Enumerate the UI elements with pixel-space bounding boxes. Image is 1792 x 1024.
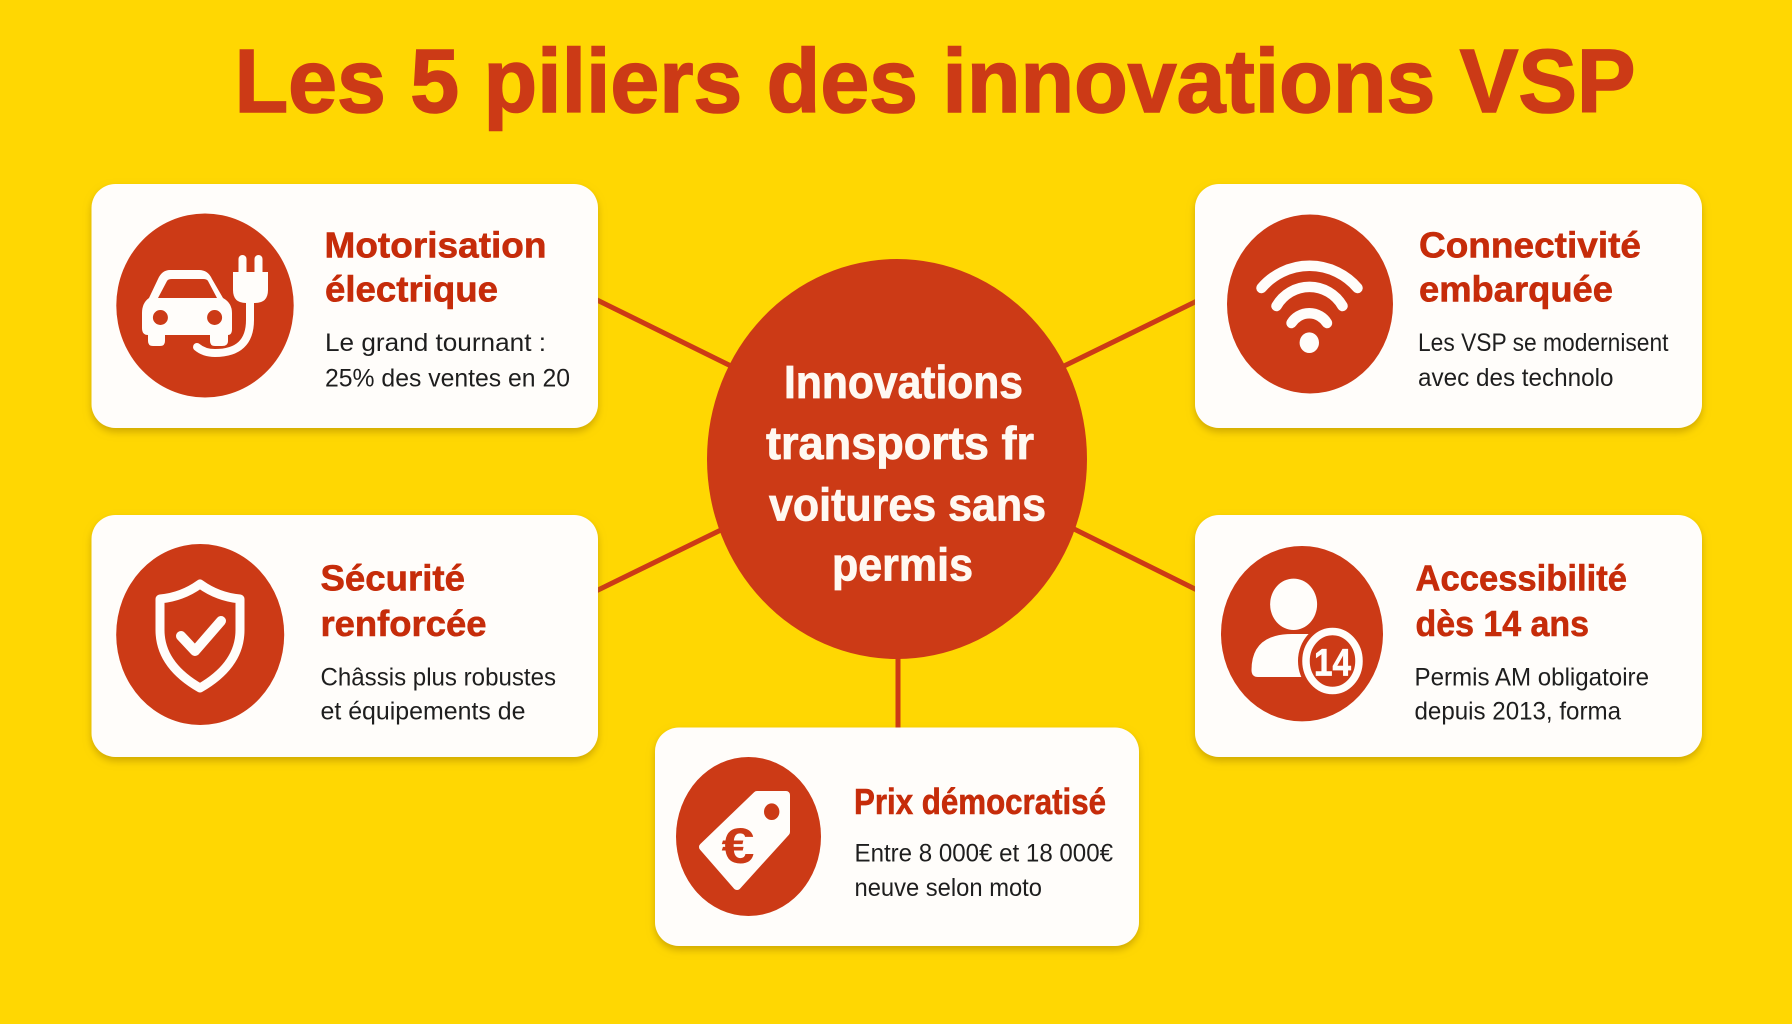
heading [1416,558,1627,644]
text block [1418,329,1669,392]
text block: depuis 2013, forma [1414,698,1621,726]
panel: connectivité embarquée [1195,184,1702,428]
panel: sécurité renforcée [92,515,598,757]
heading: Accessibilité [1416,558,1627,598]
text block: avec des technolo [1418,364,1614,392]
icon: wifi [1227,214,1393,394]
panel: central hub [707,259,1087,659]
icon: shield with check [116,544,284,725]
text block [1414,664,1649,726]
heading: Connectivité [1419,224,1641,266]
text block: 25% des ventes en 20 [325,364,570,392]
panel: motorisation électrique [92,184,598,428]
text block: Les VSP se modernisent [1418,329,1669,357]
panel: central hub: permis [832,538,973,590]
icon: euro price tag: € [722,818,754,874]
title: Les 5 piliers des innovations VSP [234,32,1636,132]
heading: Motorisation [324,224,546,266]
heading [320,558,486,644]
panel: central hub: transports fr [766,417,1034,469]
text block [854,840,1113,902]
text block [320,664,556,726]
text block: Entre 8 000€ et 18 000€ [854,840,1113,868]
text block: et équipements de [320,698,526,726]
connector lines [596,300,1197,730]
icon: person with 14 badge: 14 [1314,642,1351,684]
heading: Prix démocratisé [854,781,1106,822]
heading: électrique [325,268,498,310]
panel: central hub: voitures sans [769,478,1046,530]
heading: embarquée [1419,268,1613,310]
text block: Châssis plus robustes [320,664,556,692]
heading [1419,224,1641,310]
panel: prix démocratisé [655,728,1139,946]
heading [324,224,546,310]
text block: Le grand tournant : [325,329,546,357]
text block: Permis AM obligatoire [1414,664,1649,692]
text block: neuve selon moto [854,874,1042,902]
panel: central hub: Innovations [784,356,1023,408]
heading: Sécurité [320,558,465,598]
icon: electric car [116,214,294,398]
icon: euro price tag [676,757,821,916]
heading: renforcée [320,603,486,644]
panel: accessibilité dès 14 ans [1195,515,1702,757]
heading: dès 14 ans [1416,603,1589,644]
text block [325,329,570,392]
icon: person with 14 badge [1221,546,1383,721]
